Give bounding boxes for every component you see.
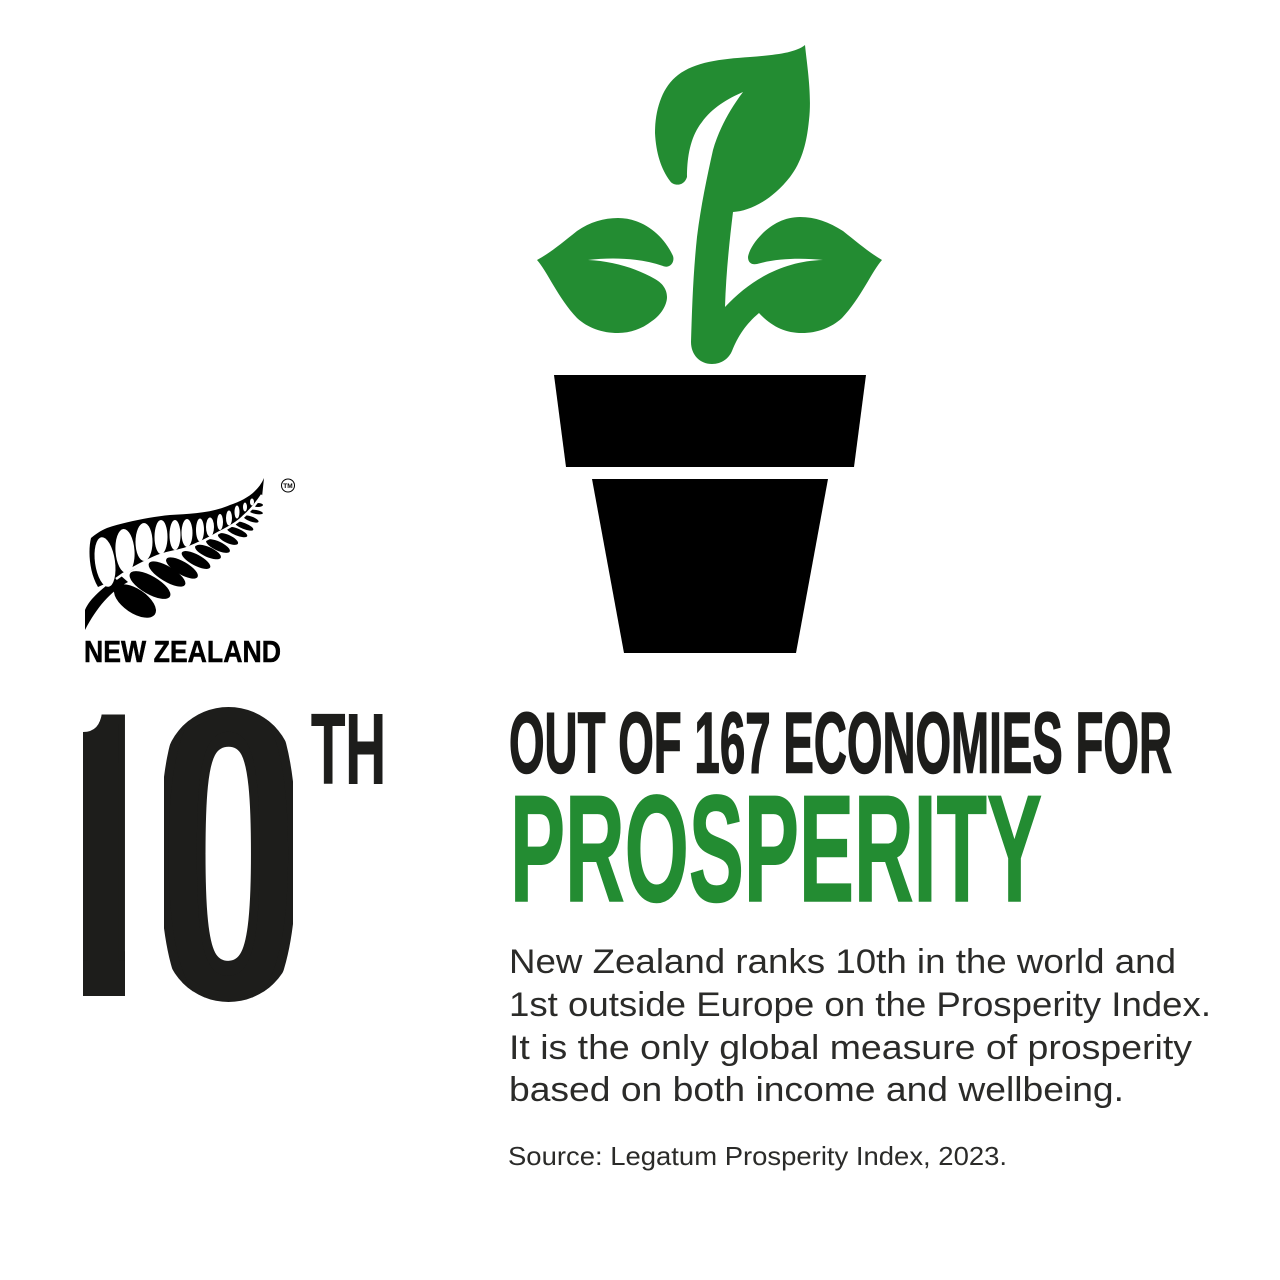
icon: plant in pot bbox=[537, 45, 882, 653]
icon: plant stem, main leaf and right leaf bbox=[655, 45, 882, 364]
icon: plant left leaf bbox=[537, 218, 673, 333]
body text: based on both income and wellbeing. bbox=[509, 1071, 1124, 1109]
big rank number: 0 bbox=[154, 593, 304, 1113]
logo: New Zealand fern mark bbox=[84, 478, 294, 669]
trademark symbol bbox=[282, 479, 294, 492]
source note: Source: Legatum Prosperity Index, 2023. bbox=[508, 1141, 1007, 1171]
trademark symbol: TM bbox=[283, 483, 293, 490]
body text: New Zealand ranks 10th in the world and bbox=[509, 943, 1176, 981]
body text bbox=[509, 943, 1211, 1109]
rank suffix: TH bbox=[311, 694, 386, 806]
logo wordmark: NEW ZEALAND bbox=[84, 634, 281, 669]
big rank number: 1 bbox=[22, 631, 172, 1083]
body text: It is the only global measure of prosperity bbox=[509, 1029, 1192, 1067]
body text: 1st outside Europe on the Prosperity Index. bbox=[509, 986, 1211, 1024]
icon: pot base bbox=[592, 479, 828, 653]
icon: pot rim bbox=[554, 375, 866, 467]
icon: silver fern bbox=[85, 478, 264, 630]
big rank number bbox=[83, 707, 293, 1002]
